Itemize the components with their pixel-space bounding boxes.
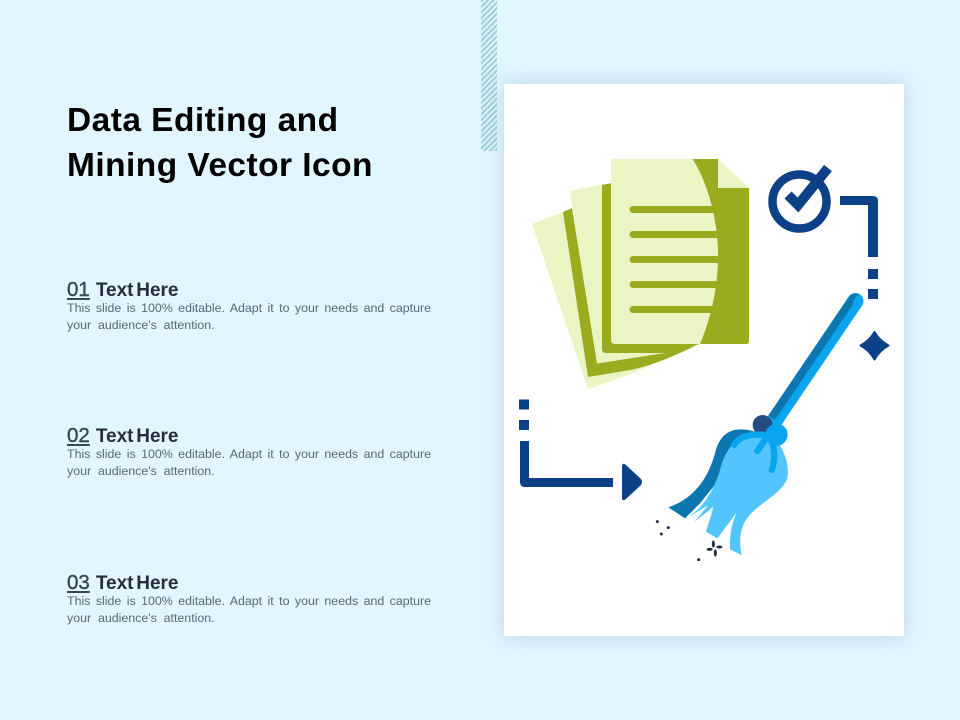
arrow: top right dashed bracket <box>840 196 878 299</box>
text block 03: This slide is 100% editable. Adapt it to your needs and capture <box>67 594 431 608</box>
icon: broom <box>668 294 859 555</box>
broom handle <box>768 294 859 420</box>
title: Mining Vector Icon <box>67 147 373 184</box>
text block 02: This slide is 100% editable. Adapt it to your needs and capture <box>67 447 431 461</box>
text block 03: 03 Text Here <box>67 571 178 594</box>
icon: stack of documents <box>532 159 749 389</box>
text block 02: your audience's attention. <box>67 464 215 478</box>
panel: illustration card <box>504 84 904 636</box>
icon: sparkle <box>860 332 888 360</box>
text block 01 <box>67 278 431 332</box>
arrow: lower left dashed bracket with arrowhead <box>519 400 642 500</box>
icon: check circle <box>772 168 828 228</box>
text block 03: your audience's attention. <box>67 610 215 624</box>
text block 02: 02 Text Here <box>67 424 178 447</box>
text block 03 <box>67 571 431 624</box>
text block 01: This slide is 100% editable. Adapt it to your needs and capture <box>67 301 431 315</box>
icon: dust specks <box>656 520 722 561</box>
title <box>67 102 373 184</box>
text block 01: your audience's attention. <box>67 318 215 332</box>
title: Data Editing and <box>67 102 338 139</box>
text block 01: 01 Text Here <box>67 278 178 301</box>
hatched strip <box>481 0 497 151</box>
text block 02 <box>67 424 431 478</box>
